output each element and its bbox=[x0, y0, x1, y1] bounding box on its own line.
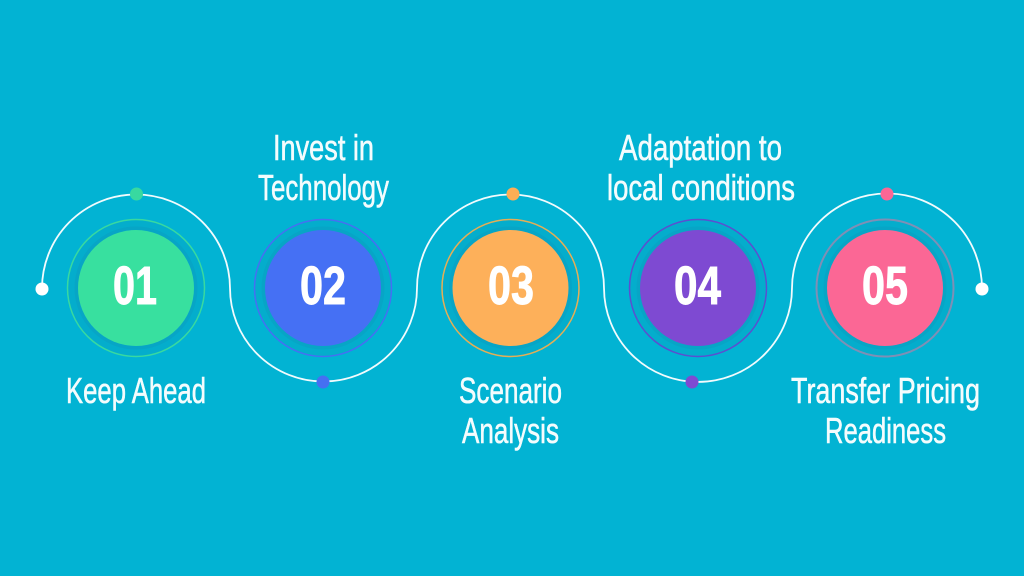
disc 01 bbox=[78, 230, 194, 346]
label: Invest in Technology: Invest in bbox=[273, 127, 374, 168]
label: Invest in Technology bbox=[258, 127, 389, 208]
label: Scenario Analysis: Analysis bbox=[462, 410, 559, 451]
marker dot 01 bbox=[130, 188, 143, 200]
line end dot: right bbox=[976, 282, 988, 296]
ring 03 bbox=[442, 220, 579, 356]
number 05: 05 bbox=[862, 256, 908, 316]
marker dot 04 bbox=[686, 376, 698, 388]
disc 02 bbox=[265, 230, 381, 346]
ring 04 bbox=[630, 220, 766, 356]
disc shadow 02 bbox=[262, 226, 384, 350]
step 05 bbox=[791, 188, 980, 451]
step 04 bbox=[607, 127, 795, 388]
label: Scenario Analysis bbox=[459, 370, 562, 451]
marker dot 03 bbox=[506, 188, 520, 200]
label: Transfer Pricing Readiness: Readiness bbox=[825, 410, 946, 451]
label: Adaptation to local conditions bbox=[607, 127, 795, 208]
disc shadow 05 bbox=[824, 226, 946, 350]
disc 05 bbox=[827, 230, 943, 346]
label: Keep Ahead: Keep Ahead bbox=[66, 370, 206, 411]
line end dot: left bbox=[36, 282, 48, 296]
marker dot 02 bbox=[316, 376, 330, 388]
disc 04 bbox=[640, 230, 756, 346]
disc shadow 03 bbox=[449, 226, 572, 350]
number 01: 01 bbox=[113, 256, 157, 316]
disc shadow 04 bbox=[636, 226, 760, 350]
number 03: 03 bbox=[488, 256, 534, 316]
label: Transfer Pricing Readiness bbox=[791, 370, 980, 451]
step 02 bbox=[254, 127, 392, 388]
label: Invest in Technology: Technology bbox=[258, 167, 389, 208]
number 04: 04 bbox=[674, 256, 721, 316]
disc 03 bbox=[452, 230, 568, 346]
ring 02 bbox=[254, 220, 392, 356]
disc shadow 01 bbox=[74, 226, 198, 350]
label: Adaptation to local conditions: local conditions bbox=[607, 167, 795, 208]
step 01 bbox=[66, 188, 206, 411]
step 03 bbox=[442, 188, 579, 451]
ring 01 bbox=[68, 220, 204, 356]
marker dot 05 bbox=[880, 188, 894, 200]
number 02: 02 bbox=[300, 256, 346, 316]
label: Scenario Analysis: Scenario bbox=[459, 370, 562, 411]
ring 05 bbox=[816, 220, 954, 356]
winding connector line bbox=[42, 193, 982, 382]
label: Adaptation to local conditions: Adaptation to bbox=[619, 127, 782, 168]
